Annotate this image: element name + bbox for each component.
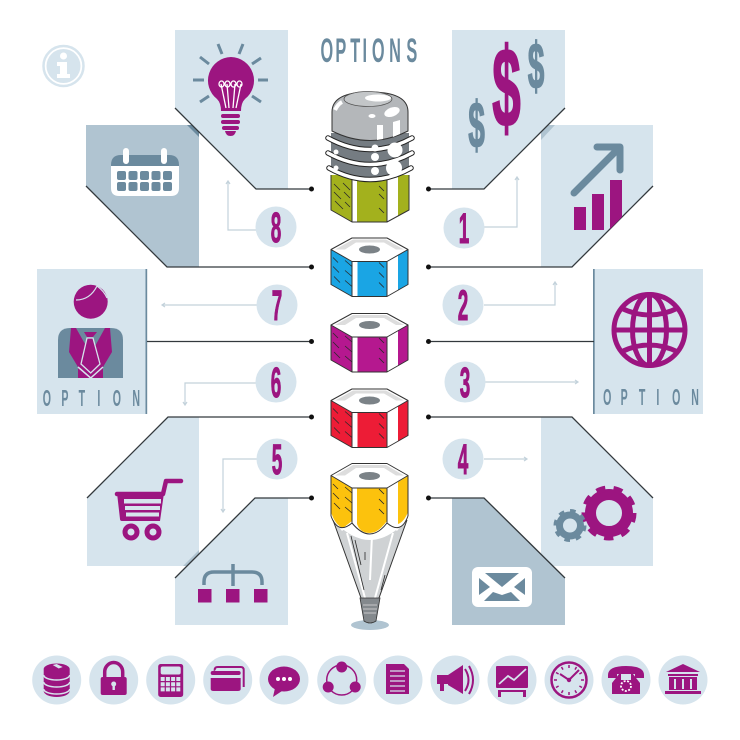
- number 3: [444, 359, 486, 407]
- bottom icon: telephone: [602, 656, 650, 704]
- icon: dollar signs: $: [528, 29, 544, 102]
- number 8: [256, 204, 296, 252]
- icon: light bulb: [193, 44, 268, 136]
- number 5: [256, 436, 298, 484]
- pencil: [328, 92, 412, 630]
- pencil: red segment: [331, 389, 408, 448]
- bottom icon: calculator: [146, 656, 195, 704]
- number 4: 4: [458, 436, 469, 484]
- panel: mail: [427, 498, 565, 625]
- icon: globe: [614, 294, 685, 366]
- arrows: [162, 177, 578, 512]
- number 2: 2: [458, 282, 468, 330]
- icon: business person: [58, 285, 123, 378]
- connector dots: [309, 186, 431, 500]
- panel: shopping cart: [87, 417, 311, 566]
- pencil: blue segment: [331, 238, 408, 296]
- bottom icon: database: [32, 656, 81, 704]
- bottom icon: cards: [203, 656, 252, 704]
- number 5: 5: [272, 436, 282, 484]
- number 3: 3: [460, 359, 470, 407]
- bottom icon: megaphone: [430, 656, 480, 704]
- number 7: 7: [272, 282, 282, 330]
- icon: dollar signs: $: [468, 88, 485, 161]
- icon: info: [44, 46, 84, 86]
- bottom icon: network: [317, 656, 366, 704]
- panel: globe: [427, 269, 703, 414]
- icon: dollar signs: [468, 26, 544, 161]
- bottom icon: bank: [658, 656, 708, 704]
- label: option: OPTION: [43, 385, 140, 411]
- icon: envelope: [472, 567, 532, 607]
- icon: dollar signs: $: [492, 26, 521, 150]
- pencil: green segment with eraser ferrule: [328, 92, 412, 222]
- panel: hierarchy: [175, 498, 311, 625]
- title: OPTIONS: [321, 31, 417, 70]
- panel: dollars: [427, 26, 565, 189]
- icon: gears: [556, 488, 634, 540]
- bottom icon: speech bubble: [260, 656, 308, 704]
- bottom icon: clock: [544, 656, 594, 704]
- ferrule rings: [328, 133, 412, 180]
- number 1: 1: [459, 205, 469, 253]
- pencil: yellow segment and cone tip: [331, 464, 408, 630]
- pencil: magenta segment: [331, 314, 408, 372]
- number 7: [256, 282, 298, 330]
- panel: chart: [427, 125, 653, 267]
- number 1: [444, 205, 484, 253]
- bottom icon: padlock: [89, 656, 138, 704]
- panel: light bulb: [175, 30, 311, 189]
- icon: calendar: [111, 148, 179, 196]
- number 2: [442, 282, 484, 330]
- icon: hierarchy: [198, 564, 268, 602]
- panel: person: [37, 269, 311, 414]
- number 8: 8: [271, 204, 281, 252]
- panel: calendar: [86, 125, 311, 267]
- label: option: OPTION: [603, 384, 699, 410]
- icon: growth chart: [574, 147, 622, 230]
- number 6: 6: [271, 359, 281, 407]
- icon: shopping cart: [117, 481, 181, 538]
- bottom icon: document: [374, 656, 422, 704]
- panel: gears: [427, 417, 653, 566]
- number 6: [256, 359, 296, 407]
- eraser dome: [332, 92, 408, 140]
- number 4: [442, 436, 484, 484]
- bottom icon: presentation board: [488, 656, 536, 704]
